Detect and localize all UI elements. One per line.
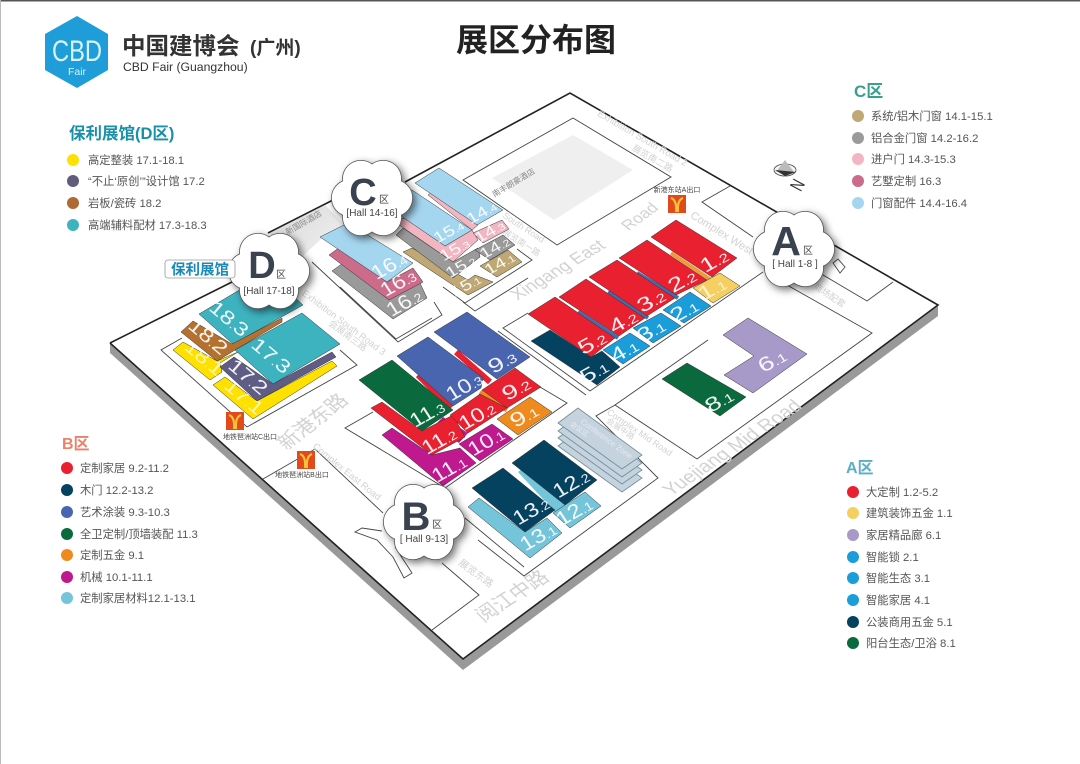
hall 9.2: 9.2 bbox=[497, 372, 535, 405]
hall 13.2 bbox=[472, 468, 555, 532]
hall 4.2 bbox=[559, 279, 645, 338]
legend: zone A: 公装商用五金 5.1 bbox=[866, 615, 953, 629]
map base board bbox=[110, 93, 938, 670]
road labels: Exhibition South Road 2 bbox=[595, 109, 689, 169]
road labels: 展览南二路 bbox=[631, 142, 675, 174]
cloud badge: zone C bbox=[331, 160, 413, 236]
icon: compass bbox=[774, 160, 809, 194]
map road and block outlines: 南丰朗豪酒店 bbox=[490, 166, 537, 199]
hall 12.1: 12.1 bbox=[551, 492, 597, 530]
legend: zone A: A区 bbox=[846, 460, 874, 477]
road labels: Complex Mid Road bbox=[605, 407, 674, 458]
legend: zone A: 阳台生态/卫浴 8.1 bbox=[866, 636, 956, 650]
legend: zone D bbox=[67, 123, 207, 232]
hall 9.3: 9.3 bbox=[483, 345, 521, 378]
road labels: 阅江中路 bbox=[471, 566, 554, 626]
road labels: Complex East Road bbox=[310, 441, 383, 503]
hall 8.1: 8.1 bbox=[700, 384, 738, 417]
legend: zone B: 艺术涂装 9.3-10.3 bbox=[80, 505, 170, 519]
cloud badge: zone C: [Hall 14-16] bbox=[346, 208, 398, 219]
road labels: South Road bbox=[501, 210, 546, 245]
legend: zone D: 高端辅料配材 17.3-18.3 bbox=[88, 218, 207, 232]
hall 15.2: 15.2 bbox=[442, 251, 479, 281]
icon: metro exit C bbox=[223, 412, 277, 441]
hall 16.3 bbox=[329, 247, 423, 301]
cloud badge: zone C: 区 bbox=[379, 194, 389, 206]
logo: CBD Fair: CBD Fair (Guangzhou) bbox=[123, 60, 248, 74]
zone A halls bbox=[528, 220, 807, 417]
hall 5.1: 5.1 bbox=[575, 355, 613, 388]
hall 17.1 bbox=[213, 361, 337, 419]
conference zone stack: Conference Zone bbox=[579, 417, 635, 461]
hall 1.2 bbox=[651, 220, 737, 277]
hall 9.3 bbox=[434, 312, 530, 379]
hall 14.4: 14.4 bbox=[463, 197, 500, 227]
legend: zone B: 全卫定制/顶墙装配 11.3 bbox=[80, 527, 198, 541]
hall 15.1: 15.1 bbox=[447, 270, 484, 300]
hall 6.1: 6.1 bbox=[753, 344, 791, 377]
road labels: Road bbox=[617, 200, 663, 234]
hall 11.3: 11.3 bbox=[405, 395, 449, 432]
cloud badge: zone A: 区 bbox=[803, 245, 813, 257]
hall 18.3: 18.3 bbox=[205, 296, 253, 341]
hall 18.3 bbox=[199, 273, 303, 344]
hall 18.2 bbox=[181, 314, 282, 361]
hall 17.2 bbox=[220, 352, 336, 401]
road labels bbox=[273, 109, 848, 626]
logo: CBD Fair: (广州) bbox=[250, 37, 301, 59]
cloud badge: zone D: 区 bbox=[276, 269, 286, 281]
cloud badge: zone D: D bbox=[248, 245, 276, 287]
legend: zone C: 进户门 14.3-15.3 bbox=[871, 152, 956, 166]
legend: zone B: 机械 10.1-11.1 bbox=[80, 570, 153, 584]
legend: zone C: C区 bbox=[854, 82, 883, 101]
hall 18.2: 18.2 bbox=[184, 314, 232, 359]
cloud badge: zone B: [ Hall 9-13] bbox=[400, 534, 448, 545]
hall 6.1 bbox=[723, 318, 807, 393]
logo: CBD Fair: 中国建博会 bbox=[122, 33, 240, 59]
hall 17.1: 17.1 bbox=[220, 374, 268, 419]
conference zone stack bbox=[558, 408, 642, 492]
logo: CBD Fair: CBD bbox=[52, 35, 102, 68]
legend: zone B: 木门 12.2-13.2 bbox=[80, 483, 153, 497]
hall 17.2: 17.2 bbox=[224, 354, 272, 399]
legend: zone B bbox=[61, 436, 198, 605]
hall 3.1: 3.1 bbox=[632, 314, 670, 347]
cloud badge: zone B: B bbox=[402, 495, 430, 539]
hall 13.1 bbox=[468, 498, 562, 558]
hall 15.4: 15.4 bbox=[430, 216, 467, 246]
hall 2.1: 2.1 bbox=[665, 294, 703, 327]
hall 8.1 bbox=[662, 363, 746, 417]
hall 4.2: 4.2 bbox=[604, 305, 642, 338]
hall 14.1: 14.1 bbox=[481, 248, 518, 278]
hall 10.3 bbox=[397, 337, 487, 406]
legend: zone A: 智能家居 4.1 bbox=[866, 593, 930, 607]
hall 5.1 bbox=[531, 330, 620, 388]
icon: metro exit A bbox=[654, 185, 700, 213]
hall 9.1: 9.1 bbox=[505, 399, 543, 432]
road labels: 会展南三路 bbox=[327, 317, 369, 353]
hall 4.1: 4.1 bbox=[605, 334, 643, 367]
hall 5.2: 5.2 bbox=[573, 326, 611, 359]
cloud badge: zone D bbox=[228, 233, 310, 309]
cloud badge: zone D: [Hall 17-18] bbox=[243, 286, 295, 297]
legend: zone B: B区 bbox=[62, 436, 90, 453]
icon: metro exit C: 地铁琶洲站C出口 bbox=[223, 432, 277, 441]
hall 16.2: 16.2 bbox=[381, 284, 426, 321]
cloud badge: zone A: A bbox=[771, 218, 801, 264]
legend: zone A: 智能生态 3.1 bbox=[866, 571, 930, 585]
hall 10.2: 10.2 bbox=[454, 396, 500, 434]
hall 4.1 bbox=[603, 333, 650, 367]
hall 11.2: 11.2 bbox=[417, 422, 461, 459]
hall 1.1: 1.1 bbox=[693, 272, 731, 305]
hall 1.2: 1.2 bbox=[695, 244, 733, 277]
cloud badge: zone A: [ Hall 1-8 ] bbox=[772, 259, 818, 270]
legend: zone B: 定制家居 9.2-11.2 bbox=[80, 461, 169, 475]
road labels: 商场配套 bbox=[812, 281, 848, 309]
legend: zone A: 智能锁 2.1 bbox=[866, 550, 919, 564]
callout: 保利展馆: 保利展馆 bbox=[171, 260, 229, 278]
road labels: Complex West bbox=[688, 209, 755, 257]
hall 2.2 bbox=[619, 240, 707, 297]
hall 11.1 bbox=[382, 428, 476, 487]
hall 14.2: 14.2 bbox=[476, 232, 513, 262]
cloud badge: zone C: C bbox=[349, 172, 377, 214]
zone C halls bbox=[320, 168, 522, 321]
legend: zone B: 定制家居材料12.1-13.1 bbox=[80, 591, 196, 605]
logo: CBD Fair bbox=[45, 16, 301, 88]
hall 11.3 bbox=[359, 360, 453, 432]
hall 15.3: 15.3 bbox=[436, 234, 473, 264]
hall 14.3: 14.3 bbox=[471, 216, 508, 246]
hall 3.2: 3.2 bbox=[632, 284, 670, 317]
hall 15.2 bbox=[396, 228, 480, 281]
logo: CBD Fair: Fair bbox=[68, 66, 87, 78]
legend: zone B: 定制五金 9.1 bbox=[80, 548, 144, 562]
hall 13.1: 13.1 bbox=[515, 517, 561, 555]
legend: zone C: 门窗配件 14.4-16.4 bbox=[871, 196, 967, 210]
legend: zone A: 大定制 1.2-5.2 bbox=[866, 485, 938, 499]
legend: zone C: 艺墅定制 16.3 bbox=[871, 174, 941, 188]
hall 17.3: 17.3 bbox=[247, 333, 295, 378]
hall 10.1: 10.1 bbox=[463, 422, 509, 460]
hall 15.3 bbox=[392, 218, 478, 264]
hall 12.2 bbox=[512, 440, 597, 505]
hall 11.1: 11.1 bbox=[427, 450, 471, 487]
icon: metro exit A: 新港东站A出口 bbox=[654, 185, 700, 194]
hall 10.2 bbox=[450, 394, 507, 434]
road labels: 会展中路 bbox=[605, 415, 637, 442]
hall 9.2 bbox=[482, 368, 541, 408]
icon: metro exit B: 地铁琶洲站B出口 bbox=[275, 470, 329, 479]
zone B halls bbox=[359, 312, 642, 558]
road labels: Yuejiang Mid Road bbox=[659, 397, 807, 500]
legend: zone C: 铝合金门窗 14.2-16.2 bbox=[871, 131, 978, 145]
hall 2.2: 2.2 bbox=[663, 264, 701, 297]
hall 3.1 bbox=[632, 313, 681, 347]
road labels: Xingang East bbox=[506, 236, 610, 304]
hall 15.1 bbox=[403, 248, 493, 300]
road labels: 展览南一路 bbox=[501, 227, 543, 259]
legend: zone C bbox=[852, 82, 993, 210]
hall 11.2 bbox=[371, 402, 465, 459]
hall 12.2: 12.2 bbox=[548, 464, 594, 502]
hall 10.1 bbox=[459, 422, 513, 461]
hall 3.2 bbox=[589, 260, 675, 317]
hall 18.1: 18.1 bbox=[180, 335, 228, 380]
legend: zone D: 高定整装 17.1-18.1 bbox=[88, 153, 184, 167]
legend: zone D: 岩板/瓷砖 18.2 bbox=[88, 196, 161, 210]
hall 2.1 bbox=[663, 292, 711, 327]
cloud badge: zone A bbox=[753, 211, 835, 287]
map road and block outlines: 新国际酒店 bbox=[284, 208, 323, 237]
icon: compass: N bbox=[787, 176, 809, 194]
legend: zone A bbox=[846, 460, 956, 650]
road labels: 展览东路 bbox=[456, 556, 496, 590]
hall 9.1 bbox=[497, 397, 552, 435]
hall 16.3: 16.3 bbox=[375, 264, 420, 301]
map road and block outlines bbox=[161, 118, 893, 630]
hall 14.4 bbox=[415, 168, 503, 227]
hall 1.1 bbox=[693, 272, 740, 305]
legend: zone A: 建筑装饰五金 1.1 bbox=[866, 506, 953, 520]
legend: zone D: “不止‘原创’”设计馆 17.2 bbox=[88, 174, 205, 188]
hall 16.4 bbox=[320, 223, 413, 284]
hall 10.3: 10.3 bbox=[441, 367, 487, 405]
zone D halls bbox=[173, 273, 340, 419]
hall 13.2: 13.2 bbox=[508, 491, 554, 529]
legend: zone D: 保利展馆(D区) bbox=[69, 123, 174, 143]
legend: zone A: 家居精品廊 6.1 bbox=[866, 528, 941, 542]
title: 展区分布图 bbox=[456, 22, 616, 58]
hall 5.2 bbox=[528, 297, 615, 359]
cloud badge: zone B: 区 bbox=[432, 519, 442, 531]
road labels: Exhibition South Road 3 bbox=[299, 288, 388, 358]
road labels: 新港东路 bbox=[273, 390, 353, 454]
conference zone stack: 会议区 bbox=[568, 419, 591, 439]
hall 16.2 bbox=[332, 263, 427, 321]
hall 17.3 bbox=[235, 313, 340, 384]
legend: zone C: 系统/铝木门窗 14.1-15.1 bbox=[871, 109, 993, 123]
icon: metro exit B bbox=[275, 451, 329, 479]
cloud badge: zone B bbox=[383, 484, 465, 560]
hall 15.4 bbox=[385, 190, 472, 246]
hall 16.4: 16.4 bbox=[366, 247, 411, 284]
